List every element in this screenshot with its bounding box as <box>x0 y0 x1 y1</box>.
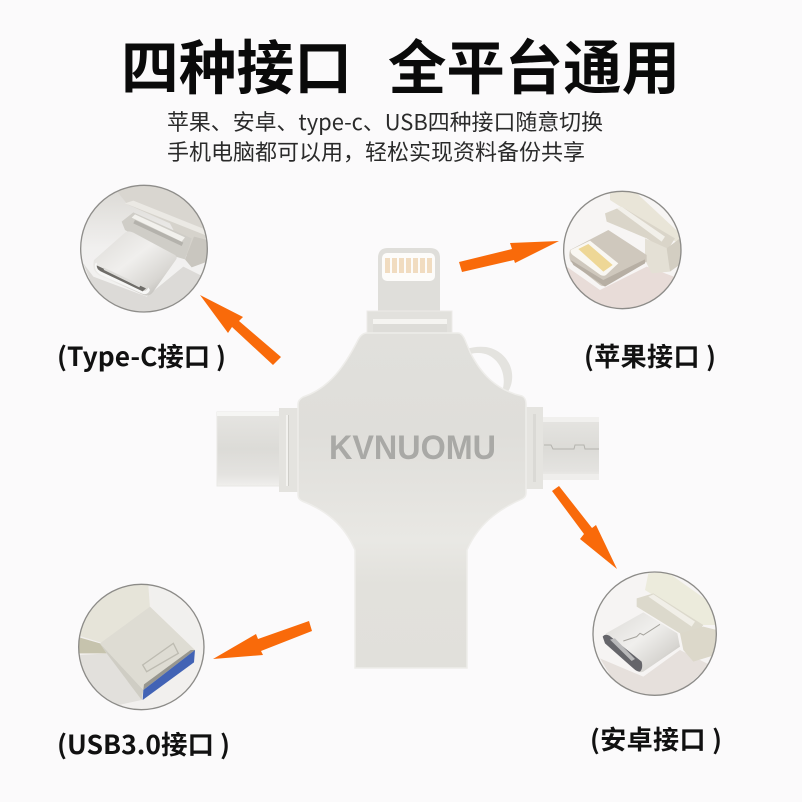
detail circle: type-c <box>80 184 208 313</box>
type-c plug <box>217 408 299 492</box>
label: apple: (苹果接口 ) <box>584 337 716 374</box>
key ring <box>467 347 512 397</box>
micro usb plug <box>525 407 599 489</box>
title <box>121 21 680 106</box>
subtitle text: 苹果、安卓、type-c、USB四种接口随意切换 <box>167 105 603 137</box>
title: 四种接口 <box>121 21 352 106</box>
drive body <box>298 333 526 668</box>
arrow: to lightning <box>459 241 559 272</box>
detail circle: usb 3.0 <box>77 582 207 712</box>
detail circle: lightning <box>563 190 682 310</box>
product: four-in-one USB drive <box>217 248 599 668</box>
arrow: to type-c <box>200 295 281 365</box>
lightning plug <box>367 248 452 335</box>
detail circle: micro usb <box>590 570 720 700</box>
subtitle text <box>167 105 603 167</box>
brand name: KVNUOMU <box>329 429 496 467</box>
label: android: (安卓接口 ) <box>590 720 722 757</box>
subtitle text: 手机电脑都可以用，轻松实现资料备份共享 <box>167 135 585 167</box>
label: usb 3.0: (USB3.0接口 ) <box>57 725 230 762</box>
arrow: to micro usb <box>552 486 617 569</box>
label: type-c: (Type-C接口 ) <box>57 337 226 374</box>
arrow: to usb 3.0 <box>213 621 312 659</box>
title: 全平台通用 <box>388 21 680 106</box>
